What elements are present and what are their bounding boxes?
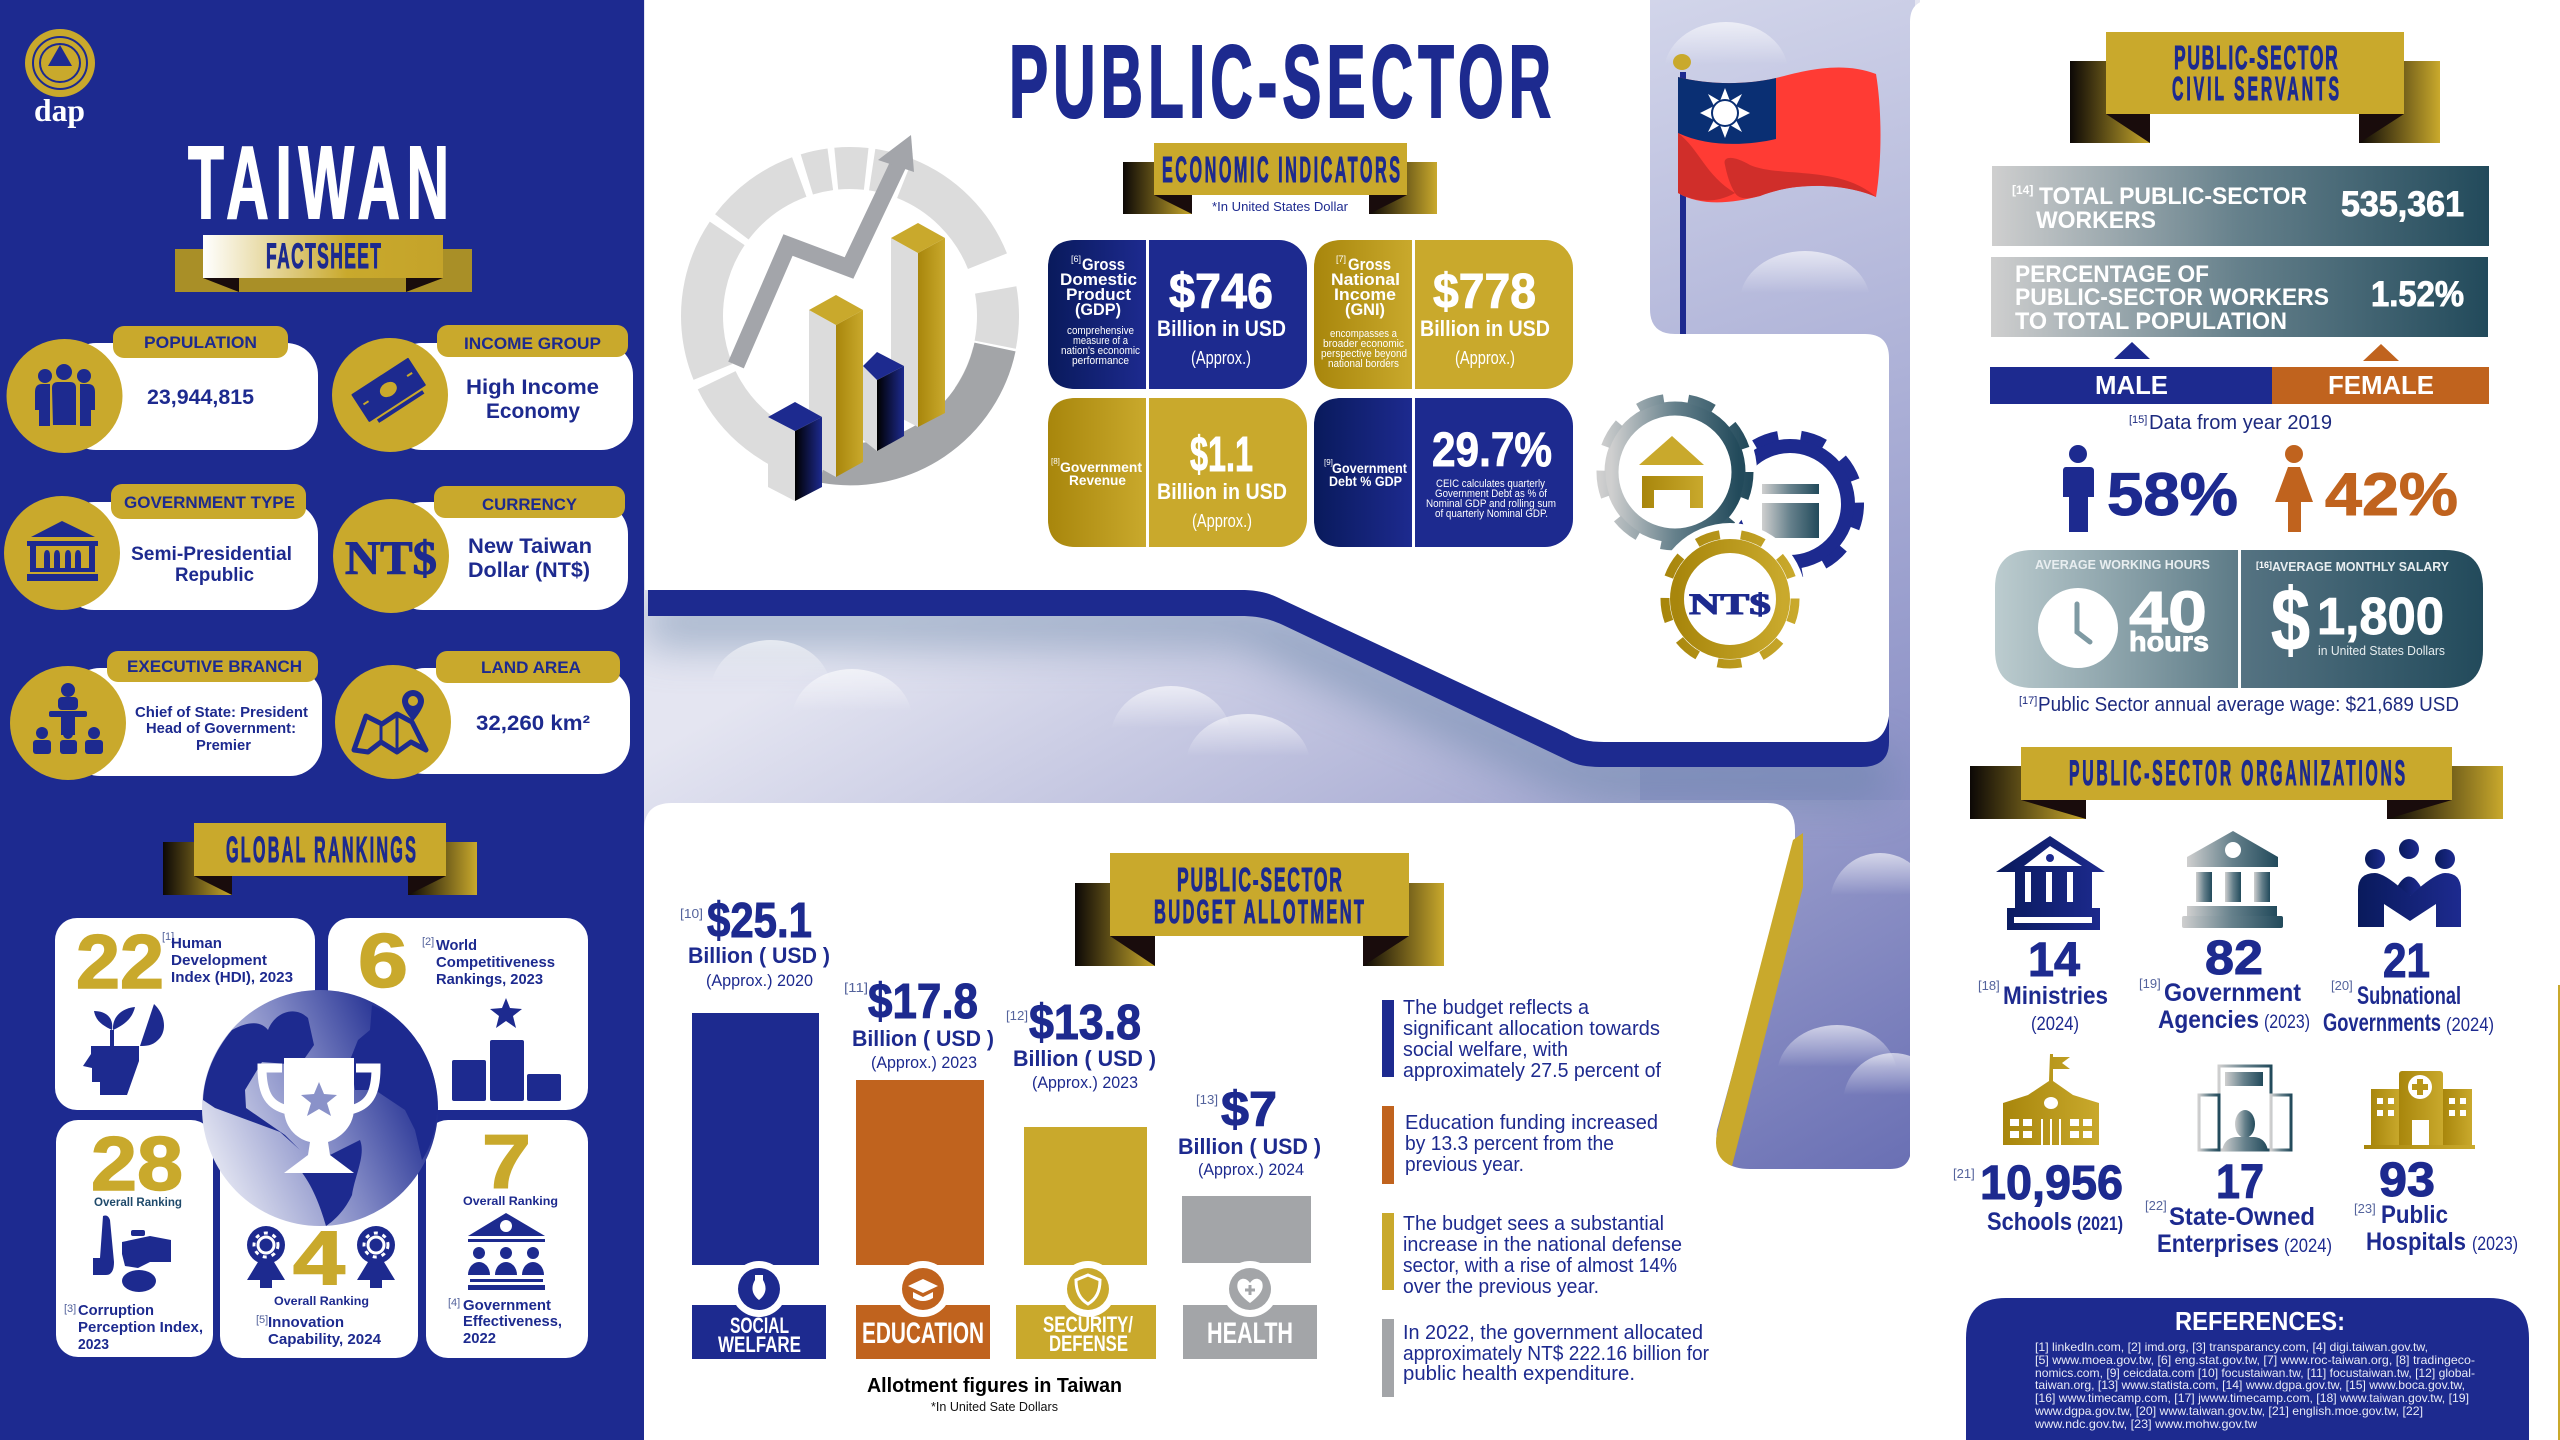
- ribbon: budget allotment: [1075, 853, 1444, 966]
- org: government agencies: [2139, 831, 2310, 1034]
- bar: security and defense: DEFENSE: [1049, 1331, 1128, 1356]
- stat: female share: 42%: [2325, 461, 2458, 528]
- card: government debt: [1314, 398, 1573, 547]
- card: land area: 32,260 km²: [476, 712, 590, 735]
- ribbon: global rankings: [163, 823, 477, 895]
- box: working hours: 40: [2129, 580, 2207, 645]
- note: defense: [1382, 1213, 1682, 1298]
- icon: people group: [2358, 839, 2461, 927]
- org: state-owned enterprises: [22]: [2145, 1198, 2167, 1213]
- icon: head with plant: [83, 1004, 164, 1095]
- bar: health: (Approx.) 2024: [1198, 1160, 1304, 1179]
- bar: social welfare: Billion ( USD ): [688, 943, 830, 968]
- stat bar: percentage: TO TOTAL POPULATION: [2015, 308, 2287, 335]
- stat bar: total workers: [1992, 166, 2489, 246]
- box: monthly salary: in United States Dollars: [2318, 643, 2445, 658]
- ribbon: budget allotment: BUDGET ALLOTMENT: [1154, 893, 1364, 931]
- icon: government effectiveness: [468, 1213, 545, 1290]
- note: education: previous year.: [1405, 1154, 1524, 1176]
- org: schools: (2021): [2077, 1214, 2123, 1235]
- card: GNI: encompasses a: [1330, 328, 1398, 340]
- box: monthly salary: [16]: [2256, 560, 2272, 570]
- card: currency: New Taiwan: [468, 535, 592, 558]
- card: land area: LAND AREA: [481, 658, 581, 677]
- card: corruption ranking: 2023: [78, 1336, 109, 1353]
- card: income group: INCOME GROUP: [464, 334, 601, 353]
- bar: social welfare: SOCIAL: [730, 1313, 789, 1338]
- stat bar: total workers: TOTAL PUBLIC-SECTOR: [2039, 183, 2307, 210]
- icon: ministry building: [1996, 836, 2105, 930]
- icon: agency building: [2182, 831, 2283, 928]
- panel: references: nomics.com, [9] ceicdata.com [10] focustaiwan.tw, [11] focustaiwan.tw, [12] global-: [2035, 1366, 2475, 1380]
- note: social welfare: social welfare, with: [1403, 1039, 1568, 1061]
- title: Taiwan: TAIWAN: [188, 125, 449, 240]
- card: currency: NT$: [345, 532, 437, 585]
- ribbon: economic indicators: ECONOMIC INDICATORS: [1162, 150, 1400, 190]
- stat: female share: [2275, 445, 2458, 532]
- card: government debt: Nominal GDP and rolling sum: [1426, 498, 1556, 510]
- org: state-owned enterprises: 17: [2216, 1156, 2264, 1209]
- icon: government building: [27, 521, 98, 581]
- org: ministries: Ministries: [2003, 982, 2108, 1010]
- icon: enterprise building: [2199, 1066, 2291, 1151]
- icon: people: [35, 364, 95, 426]
- org: public hospitals: (2023): [2472, 1234, 2518, 1255]
- card: GDP: performance: [1072, 355, 1129, 367]
- card: GNI: (Approx.): [1455, 348, 1515, 368]
- band shadow: [645, 600, 1889, 800]
- org: state-owned enterprises: (2024): [2284, 1236, 2332, 1257]
- card: corruption ranking: Corruption: [78, 1302, 154, 1319]
- bar: social welfare: $25.1: [707, 894, 812, 948]
- panel: references: [5] www.moea.gov.tw, [6] eng.stat.gov.tw, [7] www.roc-taiwan.org, [8] tradingeco-: [2035, 1353, 2475, 1367]
- card: currency: Dollar (NT$): [468, 559, 590, 582]
- org: public hospitals: Hospitals: [2366, 1228, 2466, 1256]
- card: GNI: National: [1331, 270, 1400, 289]
- org: public hospitals: Public: [2381, 1201, 2448, 1229]
- card: GDP: $746: [1169, 265, 1273, 319]
- box: monthly salary: AVERAGE MONTHLY SALARY: [2272, 559, 2449, 574]
- card: GDP: Gross: [1082, 255, 1125, 274]
- note: education: [1382, 1106, 1658, 1184]
- org: government agencies: Agencies: [2158, 1006, 2259, 1034]
- card: effectiveness ranking: Government: [463, 1297, 551, 1314]
- note: defense: increase in the national defense: [1403, 1234, 1682, 1256]
- stat bar: percentage: [1991, 257, 2488, 337]
- stat bar: percentage: PUBLIC-SECTOR WORKERS: [2015, 284, 2329, 311]
- bar: security and defense: SECURITY/: [1043, 1312, 1133, 1337]
- icon: gears: [1593, 390, 1859, 675]
- note: health: In 2022, the government allocated: [1403, 1322, 1703, 1344]
- note: data year: [15]: [2129, 414, 2147, 426]
- box: monthly salary: $: [2271, 570, 2310, 669]
- org: schools: [21]: [1953, 1166, 1975, 1181]
- bar: security and defense: Billion ( USD ): [1013, 1046, 1156, 1071]
- card: GDP: Product: [1066, 285, 1131, 304]
- chart caption: [867, 1375, 1122, 1414]
- icon: refusing bribe: [93, 1216, 171, 1292]
- card: GDP: comprehensive: [1067, 325, 1134, 337]
- card: currency: [333, 486, 628, 613]
- org: state-owned enterprises: State-Owned: [2169, 1203, 2315, 1231]
- note: social welfare: approximately 27.5 percent of: [1403, 1060, 1661, 1082]
- bar: security and defense: [1006, 996, 1156, 1359]
- card: GDP: nation's economic: [1061, 345, 1140, 357]
- org: subnational governments: 21: [2383, 935, 2430, 988]
- card: GNI: perspective beyond: [1321, 348, 1407, 360]
- card: income group: High Income: [466, 376, 599, 399]
- panel: references: [16] www.timecamp.com, [17] jwww.timecamp.com, [18] www.taiwan.gov.tw, [19]: [2035, 1391, 2469, 1405]
- org: subnational governments: Governments: [2323, 1009, 2441, 1037]
- org: public hospitals: [23]: [2354, 1201, 2376, 1216]
- card: GDP: Domestic: [1060, 270, 1137, 289]
- background: [640, 0, 1920, 1440]
- card: innovation ranking: Innovation: [268, 1314, 344, 1331]
- stat bar: total workers: [14]: [2012, 183, 2033, 197]
- panel: public-sector top: [645, 0, 1889, 767]
- logo: dap: [34, 92, 85, 128]
- org: ministries: (2024): [2031, 1014, 2079, 1035]
- bar: health: [13]: [1196, 1092, 1218, 1107]
- card: innovation ranking: [5]: [256, 1314, 268, 1326]
- card: GNI: Income: [1334, 285, 1396, 304]
- org: schools: [1953, 1054, 2123, 1236]
- card: land area: [335, 651, 630, 779]
- note: education: by 13.3 percent from the: [1405, 1133, 1614, 1155]
- icon: rocket bulbs: [247, 1226, 395, 1288]
- card: government debt: Government: [1332, 460, 1407, 476]
- card: government type: [4, 484, 318, 610]
- bar: education: (Approx.) 2023: [871, 1053, 977, 1072]
- stat bar: total workers: 535,361: [2341, 185, 2464, 224]
- box: working hours: AVERAGE WORKING HOURS: [2035, 557, 2210, 572]
- panel: references: www.dgpa.gov.tw, [20] www.taiwan.gov.tw, [21] english.moe.gov.tw, [22]: [2034, 1404, 2423, 1418]
- card: GDP: Billion in USD: [1157, 316, 1286, 341]
- bar: health: HEALTH: [1207, 1317, 1293, 1350]
- bar: education: Billion ( USD ): [852, 1026, 994, 1051]
- gender bar: [1990, 342, 2489, 404]
- bar: social welfare: [10]: [680, 906, 703, 921]
- card: HDI ranking: 22: [76, 920, 164, 1005]
- org: government agencies: [19]: [2139, 976, 2161, 991]
- card: innovation ranking: [220, 1120, 418, 1358]
- card: government debt: 29.7%: [1432, 424, 1552, 477]
- card: GNI: (GNI): [1345, 300, 1385, 319]
- card: effectiveness ranking: Overall Ranking: [463, 1194, 558, 1208]
- note: social welfare: [1382, 997, 1661, 1082]
- card: currency: CURRENCY: [482, 495, 578, 514]
- org: government agencies: (2023): [2264, 1012, 2310, 1033]
- icon: map: [354, 690, 426, 752]
- stat bar: percentage: 1.52%: [2371, 275, 2464, 314]
- card: government revenue: Revenue: [1069, 472, 1126, 488]
- panel: references: [1966, 1298, 2529, 1440]
- card: GDP: (Approx.): [1191, 348, 1251, 368]
- org: state-owned enterprises: Enterprises: [2157, 1230, 2279, 1258]
- card: GNI: broader economic: [1323, 338, 1404, 350]
- card: government revenue: [8]: [1051, 457, 1060, 466]
- band: [648, 590, 1889, 767]
- card: HDI ranking: [55, 918, 315, 1110]
- card: GDP: (GDP): [1075, 300, 1121, 319]
- icon: Taiwan flag: [1673, 54, 1880, 334]
- card: corruption ranking: 28: [91, 1122, 183, 1207]
- chart caption: Allotment figures in Taiwan: [867, 1375, 1122, 1397]
- icon: globe with trophy: [202, 990, 438, 1226]
- note: social welfare: significant allocation towards: [1403, 1018, 1660, 1040]
- org: schools: Schools: [1987, 1208, 2072, 1236]
- card: government debt: Debt % GDP: [1329, 473, 1402, 489]
- clouds: [711, 22, 1943, 1153]
- panel: budget allotment: [644, 803, 1911, 1440]
- note: annual wage: [17]: [2019, 695, 2037, 707]
- card: government revenue: [1048, 398, 1307, 547]
- ribbon: civil servants: [2070, 32, 2440, 143]
- org: ministries: [1978, 836, 2108, 1035]
- ribbon: global rankings: GLOBAL RANKINGS: [226, 830, 416, 870]
- bar: education: EDUCATION: [862, 1317, 984, 1350]
- icon: hospital: [2364, 1071, 2475, 1149]
- bar: social welfare: [680, 894, 830, 1359]
- note: social welfare: The budget reflects a: [1403, 997, 1590, 1019]
- note: defense: sector, with a rise of almost 14%: [1403, 1255, 1677, 1277]
- gender bar: MALE: [2095, 370, 2168, 400]
- stat: male share: 58%: [2107, 461, 2238, 528]
- box: monthly salary: [2241, 550, 2483, 688]
- card: income group: [332, 325, 633, 452]
- card: executive branch: EXECUTIVE BRANCH: [127, 657, 302, 676]
- box: working hours: hours: [2129, 626, 2209, 657]
- title: public-sector: PUBLIC-SECTOR: [1009, 24, 1551, 139]
- card: government revenue: Billion in USD: [1157, 479, 1287, 504]
- ribbon: economic indicators: *In United States Dollar: [1212, 199, 1349, 214]
- card: corruption ranking: Overall Ranking: [94, 1195, 182, 1209]
- card: innovation ranking: Overall Ranking: [274, 1294, 369, 1308]
- note: defense: over the previous year.: [1403, 1276, 1599, 1298]
- org: subnational governments: [20]: [2331, 978, 2353, 993]
- card: government type: Semi-Presidential: [131, 544, 292, 565]
- card: effectiveness ranking: [426, 1120, 588, 1358]
- ribbon: budget allotment: PUBLIC-SECTOR: [1177, 861, 1342, 898]
- card: executive branch: Head of Government:: [146, 720, 296, 737]
- ribbon: factsheet: [175, 235, 472, 292]
- org: schools: 10,956: [1980, 1157, 2123, 1210]
- bar: health: Billion ( USD ): [1178, 1134, 1321, 1159]
- org: state-owned enterprises: [2145, 1066, 2332, 1258]
- icon: gears: NT$: [1689, 588, 1771, 621]
- card: HDI ranking: [1]: [162, 931, 174, 943]
- card: income group: Economy: [486, 400, 580, 423]
- icon: money: [350, 356, 430, 428]
- card: competitiveness ranking: [2]: [422, 936, 434, 948]
- card: competitiveness ranking: Rankings, 2023: [436, 971, 543, 988]
- org: government agencies: Government: [2164, 979, 2302, 1007]
- chart icon: rising bars: [674, 135, 1026, 501]
- bar: education: [11]: [844, 980, 868, 995]
- ribbon: civil servants: CIVIL SERVANTS: [2172, 72, 2339, 108]
- card: competitiveness ranking: World: [436, 937, 477, 954]
- card: GNI: Gross: [1348, 255, 1391, 274]
- icon: executive: [33, 683, 103, 754]
- icon: podium: [452, 998, 561, 1101]
- note: health: approximately NT$ 222.16 billion for: [1403, 1343, 1709, 1365]
- org: subnational governments: Subnational: [2357, 982, 2461, 1010]
- card: executive branch: Premier: [196, 737, 251, 754]
- flag backdrop: [1640, 0, 1915, 800]
- card: competitiveness ranking: Competitiveness: [436, 954, 555, 971]
- bar: education: [844, 975, 994, 1359]
- note: education: Education funding increased: [1405, 1112, 1658, 1134]
- bar: security and defense: [12]: [1006, 1008, 1028, 1023]
- bar: health: [1178, 1083, 1321, 1359]
- org: government agencies: 82: [2205, 932, 2263, 985]
- card: population: [6, 326, 318, 453]
- ribbon: organizations: [1970, 747, 2503, 819]
- panel: references: taiwan.org, [13] www.statista.com, [14] www.dgpa.gov.tw, [15] www.boca.gov.tw,: [2035, 1378, 2465, 1392]
- panel: references: REFERENCES:: [2175, 1306, 2345, 1336]
- card: innovation ranking: 4: [293, 1216, 345, 1301]
- card: corruption ranking: Perception Index,: [78, 1319, 203, 1336]
- bar: health: $7: [1221, 1083, 1277, 1137]
- note: health: [1382, 1319, 1709, 1397]
- card: government debt: of quarterly Nominal GDP.: [1435, 508, 1548, 520]
- ribbon: organizations: PUBLIC-SECTOR ORGANIZATIONS: [2069, 753, 2405, 793]
- card: HDI ranking: Human: [171, 935, 222, 952]
- bar: security and defense: $13.8: [1029, 996, 1141, 1050]
- note: health: public health expenditure.: [1403, 1363, 1635, 1385]
- ribbon: economic indicators: [1123, 143, 1437, 214]
- box: working hours: [1995, 550, 2238, 688]
- panel: references: [1] linkedIn.com, [2] imd.org, [3] transparancy.com, [4] digi.taiwan.gov.tw,: [2035, 1340, 2428, 1354]
- org: ministries: [18]: [1978, 978, 2000, 993]
- card: corruption ranking: [3]: [64, 1303, 76, 1315]
- stat: male share: [2063, 445, 2238, 532]
- card: GDP: measure of a: [1073, 335, 1129, 347]
- note: defense: The budget sees a substantial: [1403, 1213, 1664, 1235]
- card: HDI ranking: Development: [171, 952, 267, 969]
- card: government type: Republic: [175, 565, 254, 586]
- logo: [25, 29, 95, 128]
- card: government debt: CEIC calculates quarterly: [1436, 478, 1545, 490]
- card: corruption ranking: [56, 1120, 213, 1357]
- card: competitiveness ranking: 6: [358, 919, 408, 1004]
- bar: education: $17.8: [868, 975, 978, 1029]
- card: effectiveness ranking: 2022: [463, 1330, 496, 1347]
- box: monthly salary: 1,800: [2317, 588, 2444, 646]
- note: annual wage: Public Sector annual average wage: $21,689 USD: [2038, 694, 2459, 716]
- card: population: 23,944,815: [147, 386, 254, 409]
- card: executive branch: Chief of State: President: [135, 704, 308, 721]
- org: subnational governments: (2024): [2446, 1015, 2494, 1036]
- note: data year: Data from year 2019: [2149, 412, 2332, 434]
- card: GDP: [6]: [1071, 254, 1081, 264]
- icon: school: [2003, 1054, 2099, 1145]
- bar: social welfare: (Approx.) 2020: [706, 971, 813, 990]
- card: GNI: $778: [1433, 265, 1536, 319]
- org: public hospitals: [2354, 1071, 2518, 1256]
- card: government revenue: (Approx.): [1192, 511, 1252, 531]
- chart caption: *In United Sate Dollars: [931, 1399, 1058, 1414]
- card: effectiveness ranking: [4]: [448, 1297, 460, 1309]
- panel: left factsheet: [0, 0, 644, 1440]
- card: competitiveness ranking: [328, 918, 588, 1110]
- card: effectiveness ranking: 7: [482, 1120, 531, 1205]
- card: government type: GOVERNMENT TYPE: [124, 493, 295, 512]
- ribbon: civil servants: PUBLIC-SECTOR: [2174, 39, 2338, 76]
- gender bar: FEMALE: [2328, 370, 2434, 400]
- stat bar: percentage: PERCENTAGE OF: [2015, 261, 2209, 288]
- card: government debt: Government Debt as % of: [1435, 488, 1548, 500]
- card: GNI: [1314, 240, 1573, 389]
- card: government revenue: $1.1: [1190, 428, 1253, 482]
- stat bar: total workers: WORKERS: [2036, 207, 2156, 234]
- decorative gold edge: [1716, 833, 1803, 1166]
- card: GNI: [7]: [1336, 254, 1346, 264]
- org: subnational governments: [2323, 839, 2494, 1037]
- card: innovation ranking: Capability, 2024: [268, 1331, 382, 1348]
- card: GDP: [1048, 240, 1307, 389]
- card: GNI: Billion in USD: [1420, 316, 1550, 341]
- card: HDI ranking: Index (HDI), 2023: [171, 969, 293, 986]
- card: government revenue: Government: [1060, 459, 1142, 475]
- card: government debt: [9]: [1324, 458, 1333, 467]
- ribbon: factsheet: FACTSHEET: [266, 236, 381, 276]
- card: population: POPULATION: [144, 333, 257, 352]
- card: effectiveness ranking: Effectiveness,: [463, 1313, 562, 1330]
- bar: social welfare: WELFARE: [718, 1332, 801, 1357]
- panel: references: www.ndc.gov.tw, [23] www.mohw.gov.tw: [2034, 1417, 2257, 1431]
- card: executive branch: [10, 651, 322, 780]
- org: public hospitals: 93: [2379, 1154, 2435, 1207]
- bar: security and defense: (Approx.) 2023: [1032, 1073, 1138, 1092]
- panel: right column: [1910, 0, 2560, 1440]
- card: GNI: national borders: [1328, 358, 1399, 370]
- org: ministries: 14: [2028, 934, 2080, 987]
